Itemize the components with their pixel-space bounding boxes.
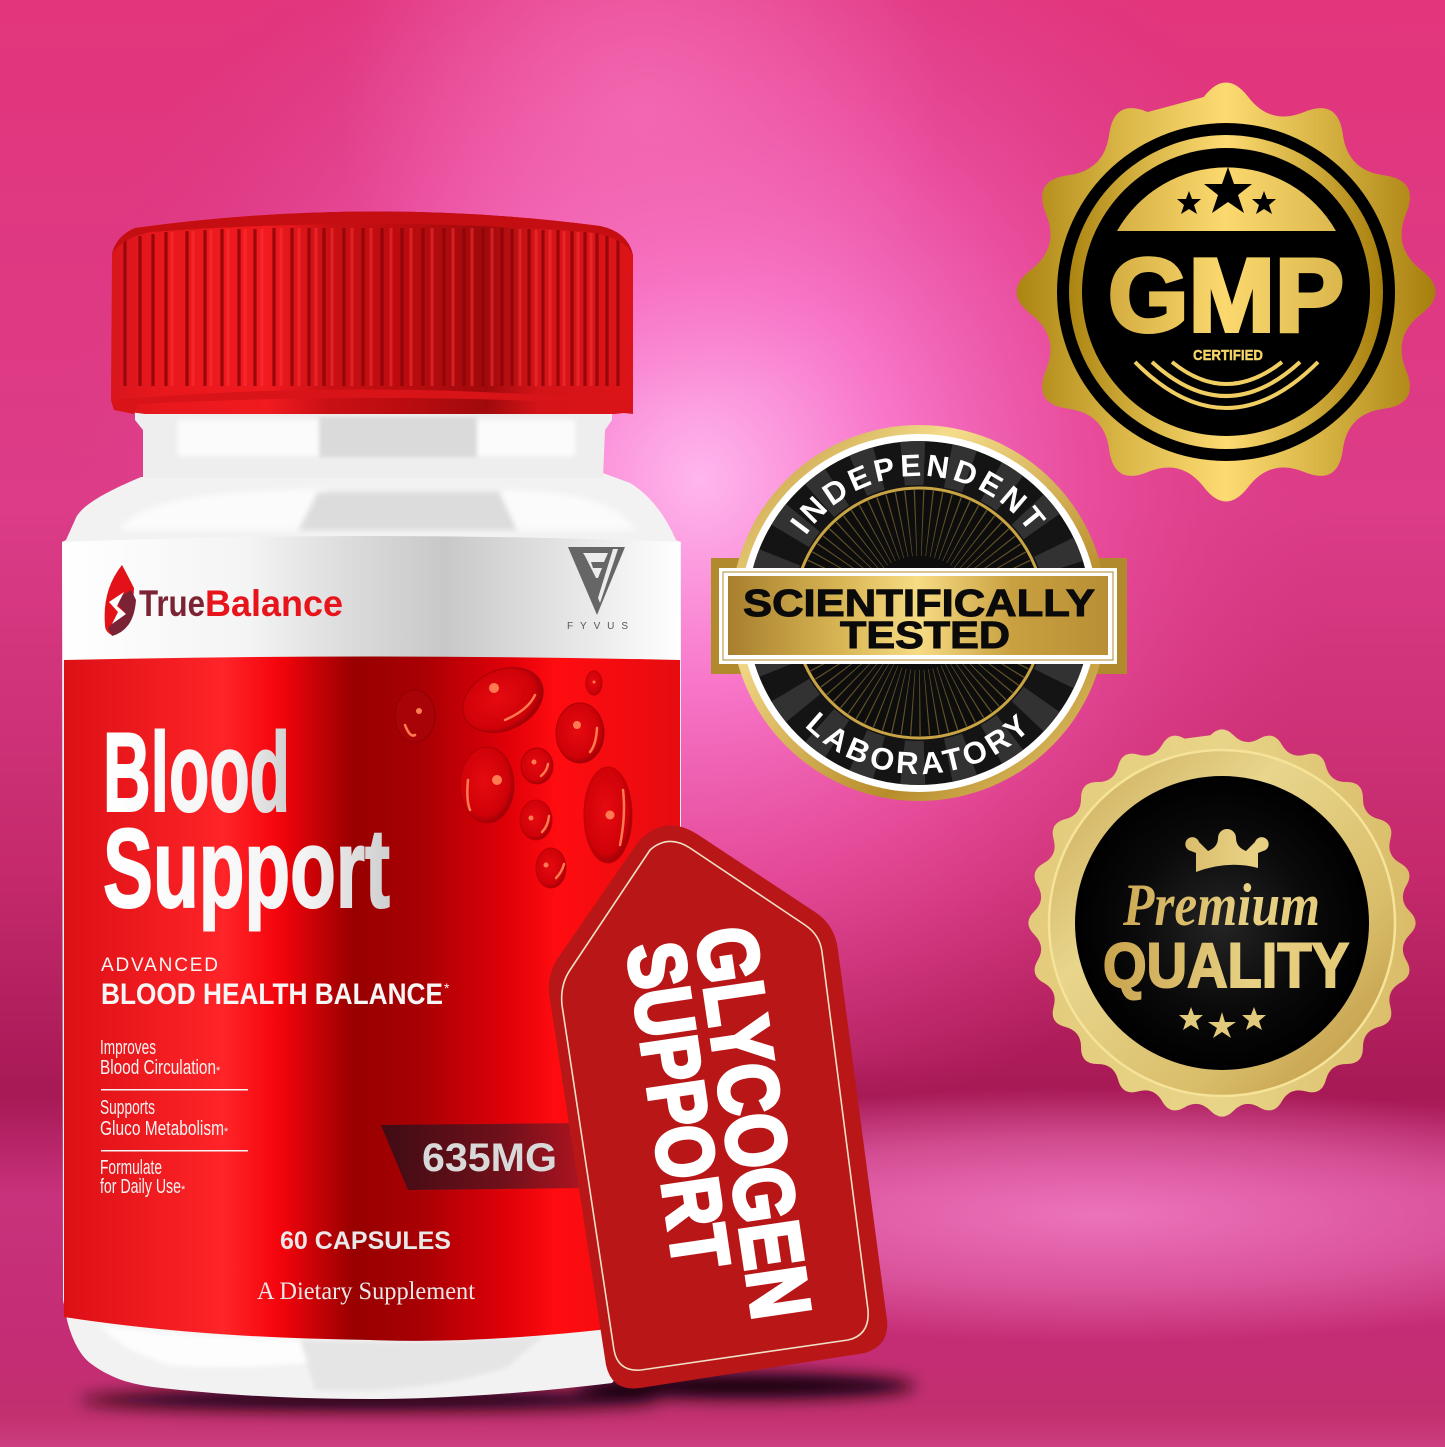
logo: True Balance: [105, 565, 343, 636]
icon: blood drop logo: [105, 565, 136, 636]
dosage banner: 635MG: [381, 1123, 585, 1190]
tag: glycogen support: [549, 825, 887, 1389]
bottle neck: [135, 398, 612, 478]
laboratory arc text: LABORATORY: [806, 712, 1025, 774]
certified text: CERTIFIED: [1193, 347, 1263, 364]
logo: True Balance: True: [139, 583, 205, 624]
GMP text: GMP: [1108, 238, 1344, 354]
bottle body: [62, 473, 681, 1399]
red blood cells: [395, 655, 632, 888]
benefits list: Gluco Metabolism: [100, 1118, 224, 1140]
independent arc text: INDEPENDENT: [790, 454, 1046, 534]
benefits list: [100, 1037, 248, 1198]
subtitle: ADVANCED: [101, 955, 218, 976]
tag: glycogen support: GLYCOGEN: [678, 921, 829, 1324]
benefits list: Supports: [100, 1097, 155, 1119]
ribbon: [719, 568, 1117, 664]
dietary supplement line: A Dietary Supplement: [257, 1278, 475, 1305]
badge: scientifically tested: [711, 425, 1127, 801]
arcs: [1135, 362, 1318, 408]
bottle shadow on floor: [80, 1373, 915, 1410]
dome with stars: [1117, 167, 1336, 231]
benefits list: Blood Circulation: [100, 1057, 216, 1079]
icon: crown: [1185, 829, 1269, 872]
benefits list: Formulate: [100, 1157, 162, 1179]
benefits list: *: [181, 1184, 186, 1196]
dosage banner: 635MG: 635MG: [422, 1136, 557, 1180]
logo: FYVUS: [567, 547, 628, 632]
title: Blood Support: Support: [103, 806, 390, 931]
badge: premium quality: [1028, 729, 1416, 1117]
three stars: [1179, 1007, 1266, 1038]
badge: scientifically tested: TESTED: [840, 615, 1010, 657]
red label: [64, 656, 680, 1341]
center sunburst: [794, 488, 1044, 738]
subtitle: BLOOD HEALTH BALANCE: [101, 978, 443, 1011]
benefits list: for Daily Use: [100, 1176, 181, 1198]
quality text: QUALITY: [1103, 931, 1349, 1001]
benefits list: *: [216, 1065, 221, 1077]
ring shading spokes: [769, 463, 1069, 763]
capsule count: 60 CAPSULES: [280, 1227, 451, 1255]
seal shape: [1016, 82, 1436, 502]
bottle: [62, 211, 681, 1399]
ribbon text: SCIENTIFICALLY: [743, 583, 1095, 625]
badge: GMP certified: [1016, 82, 1436, 502]
subtitle: *: [444, 980, 450, 996]
ribbon back tabs: [711, 558, 1127, 674]
benefits list: Improves: [100, 1037, 156, 1059]
bottle base highlights: [100, 1325, 545, 1391]
seal ring: [731, 425, 1107, 801]
subtitle: [101, 955, 450, 1011]
shoulder highlights: [120, 489, 635, 530]
tag: glycogen support: SUPPORT: [610, 936, 746, 1274]
logo: True Balance: Balance: [205, 583, 343, 624]
logo: FYVUS: FYVUS: [567, 621, 628, 632]
scalloped seal: [1028, 729, 1416, 1117]
premium script: Premium: [1122, 872, 1320, 938]
red cap: [111, 211, 633, 414]
white upper label: [62, 536, 680, 662]
benefits list: *: [224, 1126, 229, 1138]
title: Blood Support: Blood: [103, 710, 290, 835]
title: Blood Support: [103, 710, 390, 931]
